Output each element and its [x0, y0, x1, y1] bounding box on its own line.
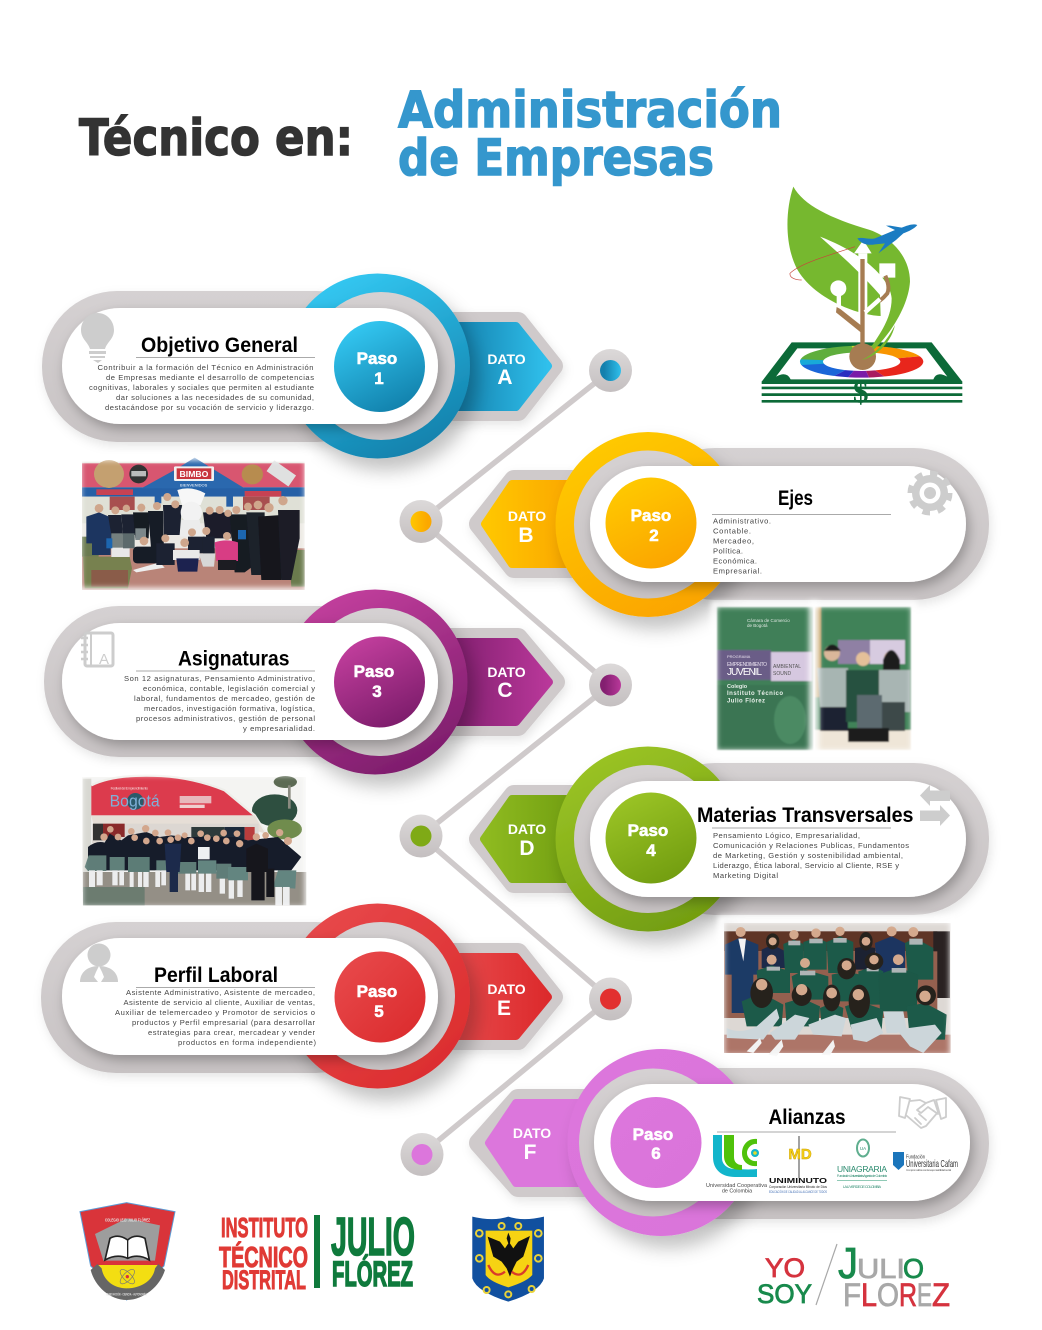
- text block: Empresarial.: [713, 566, 762, 576]
- title: Administración de Empresas: de Empresas: [398, 129, 714, 187]
- icon: handshake: [899, 1097, 946, 1128]
- icon: person with tie: [80, 944, 118, 982]
- dato E hexagon: [430, 953, 553, 1040]
- dato B hexagon: B: [518, 524, 534, 547]
- heading: Perfil Laboral: [154, 964, 278, 987]
- text block: de Empresas mediante el desarrollo de competencias: [106, 373, 314, 382]
- icon: light bulb: [81, 313, 114, 363]
- logo: Yo soy Julio Flórez: ULI: [857, 1253, 905, 1284]
- text block: Contable.: [713, 526, 751, 536]
- text block: Auxiliar de telemercadeo y Promotor de servicios o: [115, 1008, 315, 1017]
- text block: económica, contable, legislación comercial y: [143, 684, 315, 693]
- text block: Mercadeo,: [713, 536, 754, 546]
- logo: Uniagraria: Fundación Universitaria Agraria de Colombia: [837, 1174, 887, 1178]
- text in the photo: EMPRENDIMIENTO: [727, 662, 767, 668]
- logo: Yo soy Julio Flórez: O: [877, 1277, 899, 1313]
- dato D hexagon: DATO: [508, 821, 546, 837]
- panel: paso 5 perfil laboral: [41, 904, 553, 1088]
- ring: [556, 746, 740, 932]
- dato F hexagon: F: [524, 1141, 537, 1164]
- text block: laboral, fundamentos de mercadeo, gestión de: [134, 694, 315, 703]
- dato B hexagon: [479, 480, 590, 568]
- text in the photo: Julio Flórez: [727, 698, 765, 704]
- text in the photo: Instituto Técnico: [727, 691, 783, 697]
- text block: [115, 988, 316, 1047]
- photo: festival de emprendimiento Bogotá: [79, 772, 308, 910]
- logo: Universidad Cooperativa de Colombia: [706, 1135, 767, 1194]
- logo: Uniminuto: [769, 1136, 827, 1194]
- dato A hexagon: A: [497, 366, 513, 389]
- text block: [713, 516, 771, 576]
- dato C hexagon: DATO: [487, 664, 526, 680]
- logo: Yo soy Julio Flórez: YO: [765, 1253, 805, 1283]
- node C: [589, 664, 632, 706]
- text in the photo: AMBIENTAL: [773, 664, 801, 670]
- grey pill: [42, 291, 392, 442]
- step circle: Paso: [628, 821, 668, 840]
- text in the photo: SOUND: [773, 671, 791, 677]
- text block: mercados, investigación formativa, logística,: [144, 704, 315, 713]
- heading: Objetivo General: [141, 334, 298, 357]
- logo: Cafam: Universitaria Cafam: [906, 1158, 958, 1170]
- text block: productos en forma independiente): [178, 1038, 316, 1047]
- photo: visita Bimbo: BIMBO: [180, 469, 209, 479]
- text block: Asistente Administrativo, Asistente de mercadeo,: [126, 988, 315, 997]
- icon: exchange arrows: [920, 785, 950, 826]
- text block: destacándose por su vocación de servicio y liderazgo.: [105, 403, 314, 412]
- panel: paso 6 alianzas: [479, 1049, 989, 1236]
- logo: Uniagraria: LA U VERDE DE COLOMBIA: [843, 1185, 881, 1189]
- logo: Yo soy Julio Flórez: L: [861, 1277, 877, 1313]
- text in the photo: PROGRAMA: [727, 654, 751, 659]
- text block: Liderazgo, Ética laboral, Servicio al Cliente, RSE y: [713, 861, 899, 870]
- dato E hexagon: DATO: [487, 981, 526, 997]
- text in the photo: [727, 618, 801, 704]
- text block: Marketing Digital: [713, 871, 778, 880]
- logo: money bills and colour wheel: [761, 342, 962, 405]
- text block: [89, 363, 314, 412]
- logo: Instituto Técnico Distrital Julio Flórez: FLÓREZ: [332, 1254, 413, 1294]
- logo: Uniminuto: MD: [788, 1146, 812, 1163]
- logo: Uniagraria: UA: [860, 1146, 866, 1151]
- grey pill: [41, 922, 391, 1073]
- node D: [400, 814, 442, 858]
- ring: [285, 904, 470, 1088]
- icon: notebook: [81, 633, 113, 668]
- text block: de Marketing, Gestión y sostenibilidad ambiental,: [713, 851, 903, 860]
- logo: Bogotá coat of arms: [472, 1217, 544, 1302]
- logo: Cafam: Comprometidos con la responsabilidad social: [906, 1168, 951, 1172]
- text block: Política.: [713, 546, 743, 556]
- title: Administración de Empresas: [398, 81, 782, 187]
- text block: cognitivas, laborales y sociales que permiten al estudiante: [89, 383, 314, 392]
- heading: Alianzas: [768, 1106, 846, 1129]
- logo: Cafam: [893, 1152, 958, 1172]
- step circle: 2: [649, 526, 659, 545]
- logo: Uniminuto: UNIMINUTO: [769, 1176, 827, 1185]
- logo: money bills and colour wheel: $: [853, 375, 868, 410]
- title: Técnico en: Técnico en:: [79, 109, 353, 167]
- text block: productos y Perfil empresarial (para desarrollar: [132, 1018, 315, 1027]
- photo: festival de emprendimiento Bogotá: Bogotá: [110, 792, 160, 811]
- logo: Universidad Cooperativa de Colombia: Universidad Cooperativa: [706, 1183, 767, 1189]
- connector lines: [421, 371, 610, 1154]
- photo: visita Bimbo: BIENVENIDOS: [180, 482, 208, 487]
- logo: Instituto Técnico Distrital Julio Flórez: TÉCNICO: [219, 1240, 308, 1274]
- panel: paso 2 ejes: [479, 432, 989, 617]
- dato C hexagon: C: [497, 679, 513, 702]
- step circle: 4: [646, 841, 656, 860]
- white pill: [590, 466, 966, 582]
- logo: Yo soy Julio Flórez: J: [838, 1239, 858, 1288]
- text block: Administrativo.: [713, 516, 771, 526]
- dato A hexagon: DATO: [487, 351, 526, 367]
- step circle: 1: [374, 369, 384, 388]
- logo: Yo soy Julio Flórez: O: [903, 1253, 924, 1284]
- text block: Asistente de servicio al cliente, Auxiliar de ventas,: [124, 998, 315, 1007]
- white pill: [62, 308, 438, 424]
- step circle: Paso: [357, 349, 397, 368]
- step circle: 6: [651, 1144, 661, 1163]
- text block: Económica.: [713, 556, 757, 566]
- text in the photo: de Bogotá: [747, 623, 768, 628]
- panel: paso 3 asignaturas: [44, 590, 555, 774]
- logo: Uniminuto: Corporación Universitaria Minuto de Dios: [769, 1184, 827, 1189]
- photo: visita Bimbo: [78, 457, 308, 591]
- logo: Yo soy Julio Flórez: Z: [932, 1277, 950, 1313]
- text block: y empresarialidad.: [243, 724, 315, 733]
- step circle: Paso: [633, 1125, 673, 1144]
- white pill: [62, 938, 438, 1055]
- logo: Yo soy Julio Flórez: SOY: [757, 1279, 812, 1309]
- logo: Uniagraria: UNIAGRARIA: [837, 1164, 887, 1174]
- step circle: [610, 1097, 702, 1188]
- logo: Universidad Cooperativa de Colombia: de Colombia: [722, 1188, 752, 1194]
- dato D hexagon: [479, 795, 590, 883]
- panel: paso 4 materias transversales: [479, 746, 989, 932]
- ring: [285, 274, 470, 458]
- heading: Materias Transversales: [697, 804, 914, 827]
- logo: Instituto Técnico Distrital Julio Flórez: [219, 1207, 415, 1295]
- logo: school crest: COLEGIO I.E.D. JULIO FLÓREZ: [105, 1217, 150, 1222]
- text block: estrategias para crear, mercadear y vender: [148, 1028, 315, 1037]
- dato F hexagon: DATO: [513, 1125, 551, 1141]
- icon: gear: [910, 474, 950, 512]
- icon: notebook: A: [99, 651, 109, 668]
- white pill: [590, 781, 966, 897]
- text block: Pensamiento Lógico, Empresarialidad,: [713, 831, 860, 840]
- dato C hexagon: [430, 638, 555, 726]
- step circle: [606, 792, 696, 884]
- dato A hexagon: [430, 322, 553, 411]
- text in the photo: JUVENIL: [727, 667, 762, 678]
- logo: Yo soy Julio Flórez: E: [917, 1277, 932, 1313]
- text block: procesos administrativos, gestión de personal: [136, 714, 315, 723]
- photo: programa emprendimiento juvenil: [714, 604, 914, 753]
- logo: Instituto Técnico Distrital Julio Flórez: DISTRITAL: [222, 1265, 306, 1295]
- step circle: Paso: [354, 662, 394, 681]
- photo: festival de emprendimiento Bogotá: Festival del Emprendimiento: [111, 786, 148, 790]
- title: Administración de Empresas: Administración: [398, 81, 782, 139]
- text block: [713, 831, 909, 880]
- text in the photo: Colegio: [727, 684, 748, 690]
- dato F hexagon: [479, 1099, 600, 1187]
- photo: grupo de estudiantes: [721, 919, 953, 1058]
- heading: Asignaturas: [178, 648, 290, 670]
- white pill: [62, 623, 438, 740]
- logo: Cafam: Fundación: [906, 1154, 925, 1160]
- logo: school crest: [80, 1203, 175, 1300]
- node A: [589, 349, 632, 392]
- logo: Yo soy Julio Flórez: F: [843, 1277, 861, 1313]
- text block: dar soluciones a las necesidades de su comunidad,: [116, 393, 314, 402]
- logo: school crest: INNOVACIÓN · CIENCIA · AUTONOMÍA: [107, 1291, 147, 1296]
- grey pill: [640, 1068, 989, 1219]
- logo: Uniagraria: [837, 1140, 887, 1189]
- step circle: Paso: [357, 982, 397, 1001]
- logo: Uniminuto: EDUCACIÓN DE CALIDAD AL ALCANCE DE TODOS: [769, 1189, 827, 1194]
- dato D hexagon: D: [519, 837, 535, 860]
- text block: Contribuir a la formación del Técnico en Administración: [98, 363, 314, 372]
- logo: Yo soy Julio Flórez: R: [899, 1277, 917, 1313]
- dato B hexagon: DATO: [508, 508, 546, 524]
- step circle: [334, 952, 426, 1042]
- ring: [282, 590, 468, 774]
- panel: paso 1 objetivo general: [42, 274, 553, 458]
- step circle: Paso: [631, 506, 671, 525]
- node E: [589, 978, 632, 1020]
- step circle: 3: [372, 682, 382, 701]
- text in the photo: Cámara de Comercio: [747, 618, 790, 623]
- white pill: [594, 1084, 970, 1201]
- text block: [124, 674, 315, 733]
- grey pill: [44, 606, 394, 757]
- text block: Son 12 asignaturas, Pensamiento Administrativo,: [124, 674, 315, 683]
- heading: Ejes: [778, 487, 813, 510]
- grey pill: [640, 763, 989, 915]
- step circle: 5: [374, 1002, 384, 1021]
- logo: Instituto Técnico Distrital Julio Flórez: JULIO: [331, 1207, 415, 1267]
- step circle: [334, 321, 425, 412]
- ring: [568, 1049, 754, 1236]
- logo: leaf, usb tree and plane: [787, 187, 917, 370]
- dato E hexagon: E: [497, 997, 511, 1020]
- ring: [556, 432, 740, 617]
- step circle: [606, 478, 696, 568]
- text block: Comunicación y Relaciones Publicas, Fundamentos: [713, 841, 909, 850]
- logo: Yo soy Julio Flórez: [757, 1239, 950, 1313]
- grey pill: [640, 448, 989, 600]
- logo: Instituto Técnico Distrital Julio Flórez: INSTITUTO: [221, 1212, 308, 1243]
- step circle: [334, 636, 425, 728]
- node B: [400, 500, 442, 543]
- node F: [400, 1133, 444, 1176]
